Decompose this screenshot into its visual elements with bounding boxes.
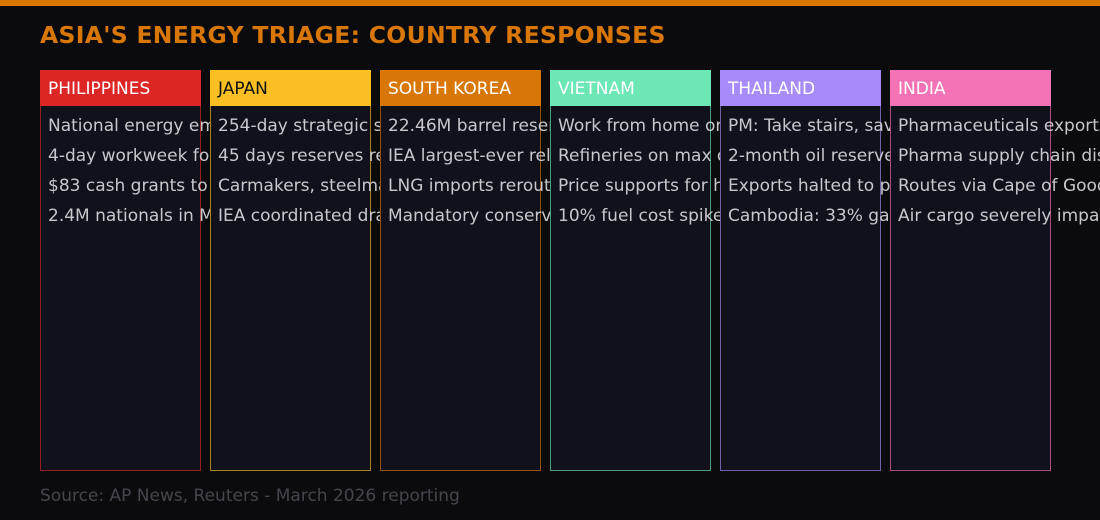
list: south korea: IEA largest-ever release (388, 146, 591, 166)
header: japan (210, 70, 371, 106)
panel: india (890, 70, 1051, 471)
list: thailand (728, 116, 983, 226)
panel: philippines (40, 70, 201, 471)
list: thailand: PM: Take stairs, save power (728, 116, 962, 136)
panel: vietnam (550, 70, 711, 471)
list: philippines: $83 cash grants to drivers (48, 176, 272, 196)
list: thailand: 2-month oil reserves (728, 146, 904, 166)
list: south korea (388, 116, 643, 226)
list: japan: IEA coordinated drawdown (218, 206, 446, 226)
header: thailand (720, 70, 881, 106)
header: vietnam: VIETNAM (558, 79, 635, 99)
header: india (890, 70, 1051, 106)
list: thailand: Cambodia: 33% gas price rise (728, 206, 983, 226)
list: south korea: Mandatory conservation (388, 206, 594, 226)
header: japan: JAPAN (218, 79, 268, 99)
list: vietnam: Work from home ordered (558, 116, 771, 136)
list: south korea: LNG imports rerouted (388, 176, 572, 196)
list: japan (218, 116, 518, 226)
list: vietnam: Refineries on max output (558, 146, 773, 166)
list: south korea: 22.46M barrel reserve release (388, 116, 643, 136)
title: ASIA'S ENERGY TRIAGE: COUNTRY RESPONSES (40, 21, 666, 49)
panel: japan (210, 70, 371, 471)
list: india (898, 116, 1100, 226)
list: philippines (48, 116, 364, 226)
list: japan: 254-day strategic stockpile (218, 116, 449, 136)
list: vietnam: 10% fuel cost spike (558, 206, 723, 226)
header: india: INDIA (898, 79, 945, 99)
header: thailand: THAILAND (728, 79, 815, 99)
text: National energy emergency declared (48, 116, 364, 136)
header: philippines (40, 70, 201, 106)
list: philippines: 2.4M nationals in Middle East (48, 206, 297, 226)
header: philippines: PHILIPPINES (48, 79, 150, 99)
header: south korea (380, 70, 541, 106)
list: philippines: 4-day workweek for government (48, 146, 325, 166)
panel: thailand (720, 70, 881, 471)
header: vietnam (550, 70, 711, 106)
list: japan: Carmakers, steelmakers cut output (218, 176, 518, 196)
panel: south korea (380, 70, 541, 471)
list: japan: 45 days reserves released (218, 146, 442, 166)
list: thailand: Exports halted to preserve (728, 176, 954, 196)
list: vietnam (558, 116, 810, 226)
header: south korea: SOUTH KOREA (388, 79, 511, 99)
source note: Source: AP News, Reuters - March 2026 reporting (40, 486, 460, 506)
list: vietnam: Price supports for households (558, 176, 810, 196)
